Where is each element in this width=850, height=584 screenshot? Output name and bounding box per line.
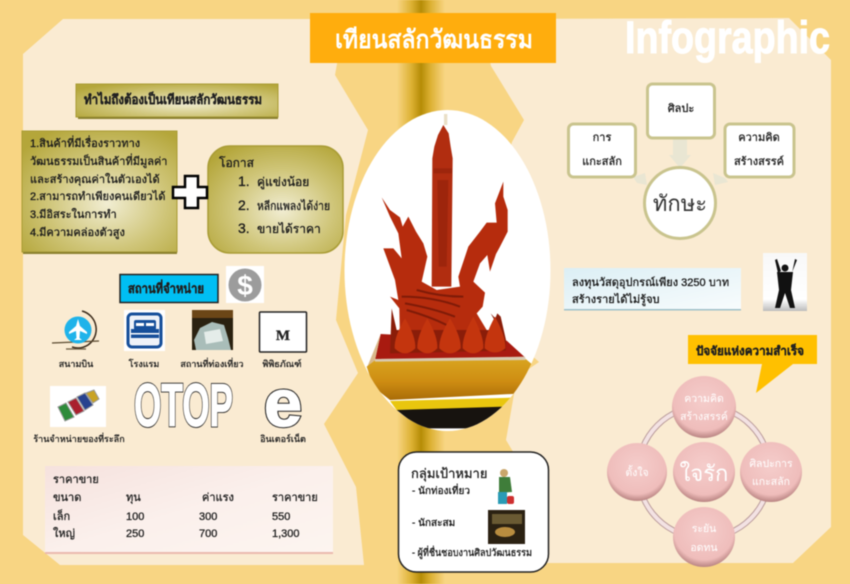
diagram: success cycle	[607, 376, 802, 567]
icon: museum M box: M	[276, 328, 290, 344]
panel: price table: 1,300	[272, 528, 300, 540]
heading: sales locations: สถานที่จำหน่าย	[128, 279, 204, 296]
panel: opportunities: 3.	[238, 220, 250, 236]
callout: investment	[564, 268, 741, 310]
panel: price table: 700	[199, 528, 217, 540]
photo: carved candle in white oval	[344, 110, 550, 431]
box: creativity: สร้างสรรค์	[734, 155, 784, 168]
panel: opportunities: 2.	[238, 197, 250, 213]
circle: skills: ทักษะ	[653, 191, 707, 216]
panel: product reasons list: และสร้างคุณค่าในตัวเองได้	[30, 173, 160, 186]
icon: airport	[52, 311, 99, 349]
callout: success factors: ปัจจัยแห่งความสำเร็จ	[696, 343, 804, 358]
panel: target group: - ผู้ที่ชื่นชอบงานศิลปวัฒนธรรม	[412, 545, 532, 559]
box: art	[648, 84, 714, 138]
node: patience: ระยัน	[692, 523, 716, 535]
panel: price table: 100	[126, 511, 144, 523]
title banner: เทียนสลักวัฒนธรรม	[335, 26, 533, 54]
panel: right cream chevron	[470, 18, 831, 563]
node: creativity	[672, 376, 736, 438]
panel: price table	[45, 466, 333, 554]
icon: internet e: e	[264, 366, 302, 440]
panel: price table: ราคาขาย	[272, 492, 318, 504]
panel: price table: 250	[126, 528, 144, 540]
label: tourist attraction: สถานที่ท่องเที่ยว	[180, 357, 244, 369]
icon: collectible painting	[488, 510, 525, 544]
panel: opportunities: หลีกแพลงได้ง่าย	[257, 199, 330, 213]
panel: opportunities: คู่แข่งน้อย	[257, 175, 309, 190]
icon: traveller	[498, 469, 514, 504]
panel: opportunities: โอกาส	[219, 156, 255, 170]
icon: OTOP wordmark: OTOP	[134, 372, 233, 439]
box: carving: แกะสลัก	[582, 156, 622, 168]
icon: OTOP wordmark	[134, 372, 233, 439]
box: creativity	[725, 124, 794, 177]
label: airport: สนามบิน	[59, 359, 93, 369]
panel: product reasons list: วัฒนธรรมเป็นสินค้าที่มีมูลค่า	[30, 153, 167, 168]
panel: product reasons list: 1.สินค้าที่มีเรื่องราวทาง	[30, 135, 140, 150]
box: art: ศิลปะ	[668, 103, 694, 115]
panel: price table: เล็ก	[53, 509, 70, 523]
panel: opportunities: 1.	[238, 173, 250, 189]
icon: hotel bed	[124, 310, 165, 351]
panel: price table: 300	[199, 511, 217, 523]
panel: price table: 550	[272, 511, 290, 523]
arrow: from creativity	[713, 173, 728, 185]
panel: why carved candles heading	[76, 84, 278, 119]
callout: investment: ลงทุนวัสดุอุปกรณ์เพียง 3250 บาท	[572, 276, 729, 289]
node: creativity: ความคิด	[684, 393, 724, 405]
callout: success factors	[688, 335, 817, 393]
icon: dollar coin	[226, 266, 264, 303]
box: carving: การ	[593, 132, 611, 144]
node: patience	[673, 507, 735, 567]
diagram: skills	[568, 84, 794, 238]
panel: target group	[398, 452, 548, 572]
label: internet: อินเตอร์เน็ต	[260, 432, 306, 444]
label: souvenir shop: ร้านจำหน่ายของที่ระลึก	[33, 432, 125, 444]
panel: price table: ใหญ่	[53, 527, 75, 540]
node: determination: ตั้งใจ	[625, 465, 649, 479]
title banner	[310, 13, 556, 63]
box: carving	[568, 124, 636, 177]
panel: target group: กลุ่มเป้าหมาย	[411, 466, 487, 482]
icon: museum M box	[260, 312, 306, 352]
label: hotel: โรงแรม	[129, 359, 159, 369]
node: carving art: ศิลปะการ	[749, 458, 793, 470]
panel: product reasons list: 4.มีความคล่องตัวสูง	[30, 226, 125, 239]
icon: person with raised arms	[763, 253, 807, 311]
icon: plus sign	[173, 176, 207, 208]
panel: target group: - นักท่องเที่ยว	[412, 483, 470, 497]
panel: product reasons list: 2.สามารถทำเพียงคนเดียวได้	[30, 190, 165, 203]
node: patience: อดทน	[690, 542, 718, 554]
panel: price table: ราคาขาย	[53, 474, 99, 486]
panel: product reasons list	[22, 131, 177, 254]
icon: internet e: e	[264, 366, 302, 440]
arrow: from carving	[633, 173, 647, 185]
icon: OTOP wordmark: OTOP	[134, 372, 233, 439]
icon: dollar coin: $	[237, 270, 253, 301]
node: passion: ใจรัก	[680, 461, 728, 486]
panel: target group: - นักสะสม	[412, 518, 455, 529]
panel: price table: ขนาด	[53, 492, 81, 504]
panel: opportunities	[208, 146, 343, 253]
panel: product reasons list: 3.มีอิสระในการทำ	[30, 208, 117, 221]
callout: investment: สร้างรายได้ไม่รู้จบ	[572, 293, 660, 306]
node: determination	[607, 443, 667, 501]
circle: skills	[644, 168, 716, 238]
label: museum: พิพิธภัณฑ์	[262, 358, 302, 369]
icon: waterfall photo	[192, 310, 233, 350]
node: carving art: แกะสลัก	[752, 476, 790, 488]
panel: opportunities: ขายได้ราคา	[257, 222, 321, 236]
panel: price table: ทุน	[126, 492, 141, 504]
node: passion	[673, 442, 735, 502]
heading: sales locations	[120, 274, 218, 302]
icon: souvenir keychains	[50, 386, 106, 427]
box: creativity: ความคิด	[738, 132, 780, 144]
panel: price table: ค่าแรง	[202, 492, 234, 504]
node: creativity: สร้างสรรค์	[680, 410, 728, 423]
panel: why carved candles heading: ทำไมถึงต้องเป็นเทียนสลักวัฒนธรรม	[84, 90, 262, 107]
node: carving art	[740, 442, 802, 502]
panel: left cream chevron	[23, 19, 368, 565]
arrow: down from art	[669, 138, 691, 168]
